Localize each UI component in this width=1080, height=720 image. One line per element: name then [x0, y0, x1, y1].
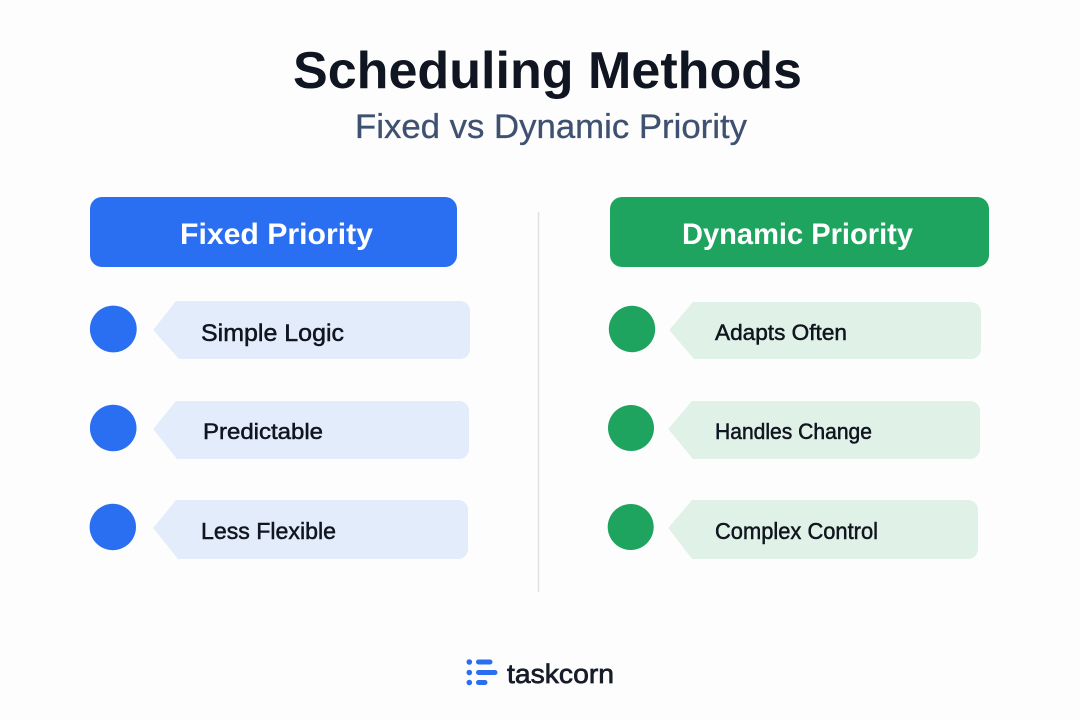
item: complex control: Complex Control: [715, 518, 878, 544]
heading: fixed priority: Fixed Priority: [180, 218, 373, 251]
item: less flexible: Less Flexible: [201, 518, 336, 544]
heading: fixed priority: [90, 197, 457, 267]
item: simple logic: Simple Logic: [201, 320, 344, 347]
item: complex control: [608, 500, 978, 559]
title: Scheduling Methods: [293, 42, 802, 100]
item: predictable: [90, 401, 469, 459]
heading: dynamic priority: [610, 197, 989, 267]
subtitle: Fixed vs Dynamic Priority: [355, 108, 747, 146]
icon: task list: [466, 659, 498, 685]
logo: taskcorn: [466, 659, 614, 689]
item: adapts often: Adapts Often: [715, 320, 847, 345]
item: adapts often: [609, 302, 981, 359]
wordmark: taskcorn: [507, 659, 614, 689]
panel: fixed priority: [90, 197, 470, 559]
item: simple logic: [90, 301, 470, 359]
item: handles change: [608, 401, 980, 459]
item: handles change: Handles Change: [715, 419, 872, 444]
panel: dynamic priority: [608, 197, 989, 559]
item: less flexible: [90, 500, 468, 559]
item: predictable: Predictable: [203, 419, 323, 444]
heading: dynamic priority: Dynamic Priority: [682, 218, 913, 251]
